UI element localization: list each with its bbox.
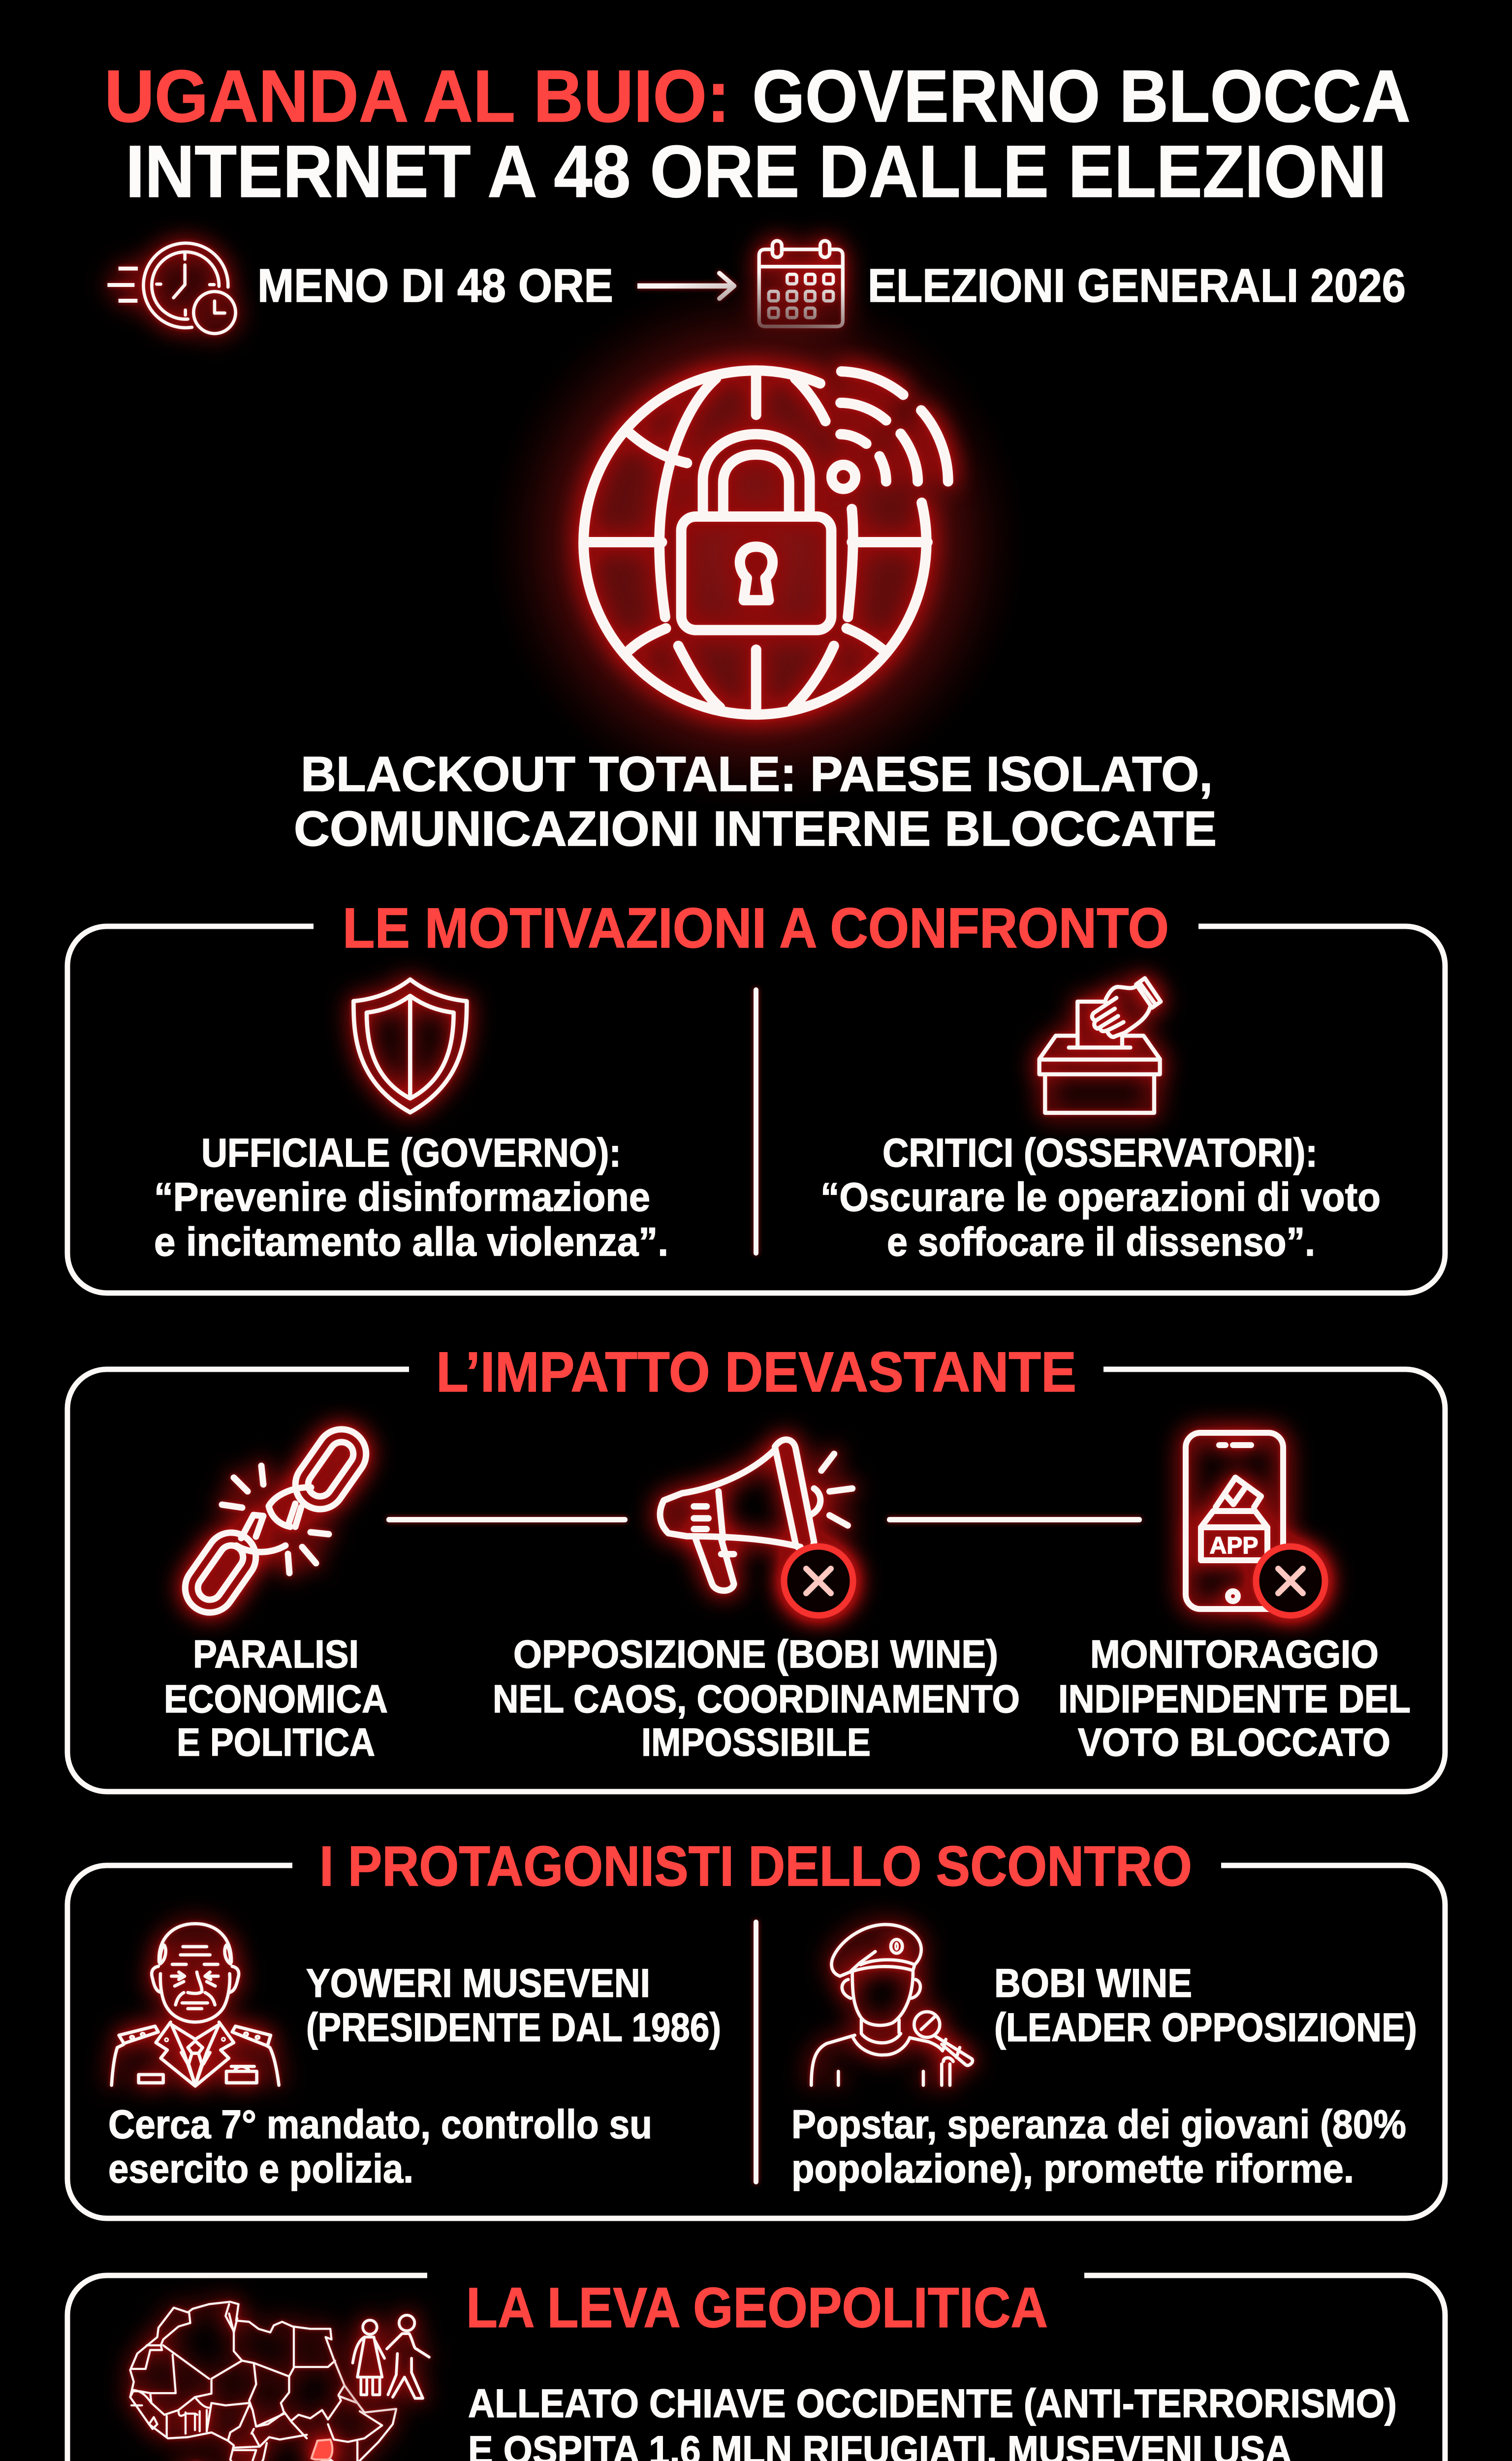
text: museveni description: Cerca 7° mandato, controllo su bbox=[108, 2102, 652, 2147]
arrow bbox=[637, 273, 734, 299]
text: paralisi: E POLITICA bbox=[177, 1720, 375, 1764]
divider bbox=[754, 987, 758, 1256]
text: critici: CRITICI (OSSERVATORI): bbox=[882, 1131, 1318, 1175]
icon: shield bbox=[353, 979, 467, 1112]
subtitle: blackout: COMUNICAZIONI INTERNE BLOCCATE bbox=[294, 801, 1217, 856]
title: UGANDA AL BUIO: bbox=[104, 55, 730, 137]
text: ufficiale: “Prevenire disinformazione bbox=[154, 1175, 650, 1220]
icon: map of Africa bbox=[130, 2302, 396, 2461]
icon: general portrait bbox=[112, 1924, 279, 2086]
text: paralisi: ECONOMICA bbox=[164, 1677, 388, 1721]
text: museveni name bbox=[306, 1961, 721, 2050]
text: leva description bbox=[468, 2381, 1397, 2461]
text: opposizione bbox=[493, 1632, 1020, 1764]
text: opposizione: OPPOSIZIONE (BOBI WINE) bbox=[513, 1632, 998, 1676]
icon: megaphone blocked bbox=[660, 1440, 853, 1615]
text: ufficiale bbox=[154, 1131, 668, 1264]
heading: LA LEVA GEOPOLITICA bbox=[466, 2276, 1048, 2339]
text: museveni name: YOWERI MUSEVENI bbox=[306, 1961, 650, 2006]
panel frame bbox=[67, 2275, 1445, 2461]
text: paralisi: PARALISI bbox=[193, 1632, 359, 1676]
text: monitoraggio: INDIPENDENTE DEL bbox=[1058, 1677, 1411, 1721]
text: ufficiale: UFFICIALE (GOVERNO): bbox=[201, 1131, 621, 1175]
text: museveni description: esercito e polizia. bbox=[108, 2146, 413, 2191]
text: critici bbox=[820, 1131, 1381, 1264]
text: bobi wine name: (LEADER OPPOSIZIONE) bbox=[994, 2005, 1417, 2050]
text: critici: “Oscurare le operazioni di voto bbox=[820, 1175, 1381, 1220]
title: INTERNET A 48 ORE DALLE ELEZIONI bbox=[126, 130, 1386, 213]
panel: i protagonisti dello scontro bbox=[67, 1835, 1445, 2218]
icon: clock bbox=[107, 243, 236, 334]
text: opposizione: NEL CAOS, COORDINAMENTO bbox=[493, 1677, 1020, 1721]
text: leva description: ALLEATO CHIAVE OCCIDENTE (ANTI-TERRORISMO) bbox=[468, 2381, 1397, 2426]
panel frame bbox=[67, 926, 1445, 1293]
text: bobi wine name bbox=[994, 1961, 1417, 2050]
title: GOVERNO BLOCCA bbox=[752, 55, 1411, 137]
icon: calendar bbox=[759, 241, 843, 326]
text: monitoraggio bbox=[1058, 1632, 1411, 1764]
text: museveni description bbox=[108, 2102, 652, 2191]
panel: la leva geopolitica bbox=[67, 2275, 1445, 2461]
divider bbox=[754, 1920, 758, 2184]
text: critici: e soffocare il dissenso”. bbox=[887, 1220, 1315, 1264]
heading: I PROTAGONISTI DELLO SCONTRO bbox=[319, 1835, 1192, 1898]
text: bobi wine name: BOBI WINE bbox=[994, 1961, 1192, 2006]
panel: l'impatto devastante bbox=[67, 1341, 1445, 1792]
icon: refugees bbox=[353, 2315, 429, 2398]
heading: LE MOTIVAZIONI A CONFRONTO bbox=[343, 897, 1169, 960]
connector lines bbox=[386, 1517, 1142, 1522]
heading: L’IMPATTO DEVASTANTE bbox=[436, 1341, 1076, 1404]
subtitle: blackout: BLACKOUT TOTALE: PAESE ISOLATO, bbox=[301, 747, 1213, 802]
countdown text: MENO DI 48 ORE bbox=[257, 259, 613, 312]
text: monitoraggio: MONITORAGGIO bbox=[1090, 1632, 1379, 1676]
text: bobi wine description: popolazione), promette riforme. bbox=[791, 2146, 1354, 2191]
title bbox=[104, 55, 1411, 213]
panel: le motivazioni a confronto bbox=[67, 897, 1445, 1293]
text: monitoraggio: VOTO BLOCCATO bbox=[1078, 1720, 1390, 1764]
subtitle: blackout bbox=[294, 747, 1217, 856]
panel frame bbox=[67, 1369, 1445, 1792]
text: bobi wine description bbox=[791, 2102, 1406, 2191]
text: ufficiale: e incitamento alla violenza”. bbox=[154, 1220, 668, 1264]
icon: broken chain bbox=[176, 1420, 376, 1622]
text: museveni name: (PRESIDENTE DAL 1986) bbox=[306, 2005, 721, 2050]
globe halo bbox=[486, 272, 1028, 813]
text: bobi wine description: Popstar, speranza dei giovani (80% bbox=[791, 2102, 1406, 2147]
icon: globe with padlock bbox=[584, 371, 948, 715]
icon: ballot box bbox=[1040, 978, 1161, 1113]
text: paralisi bbox=[164, 1632, 388, 1764]
icon: phone app blocked bbox=[1186, 1433, 1325, 1615]
elections text: ELEZIONI GENERALI 2026 bbox=[868, 259, 1406, 312]
icon: phone app blocked: APP bbox=[1210, 1533, 1258, 1559]
text: opposizione: IMPOSSIBILE bbox=[641, 1720, 871, 1764]
icon: bobi wine portrait bbox=[811, 1925, 973, 2085]
Uganda highlight bbox=[312, 2439, 332, 2460]
panel frame bbox=[67, 1865, 1445, 2218]
